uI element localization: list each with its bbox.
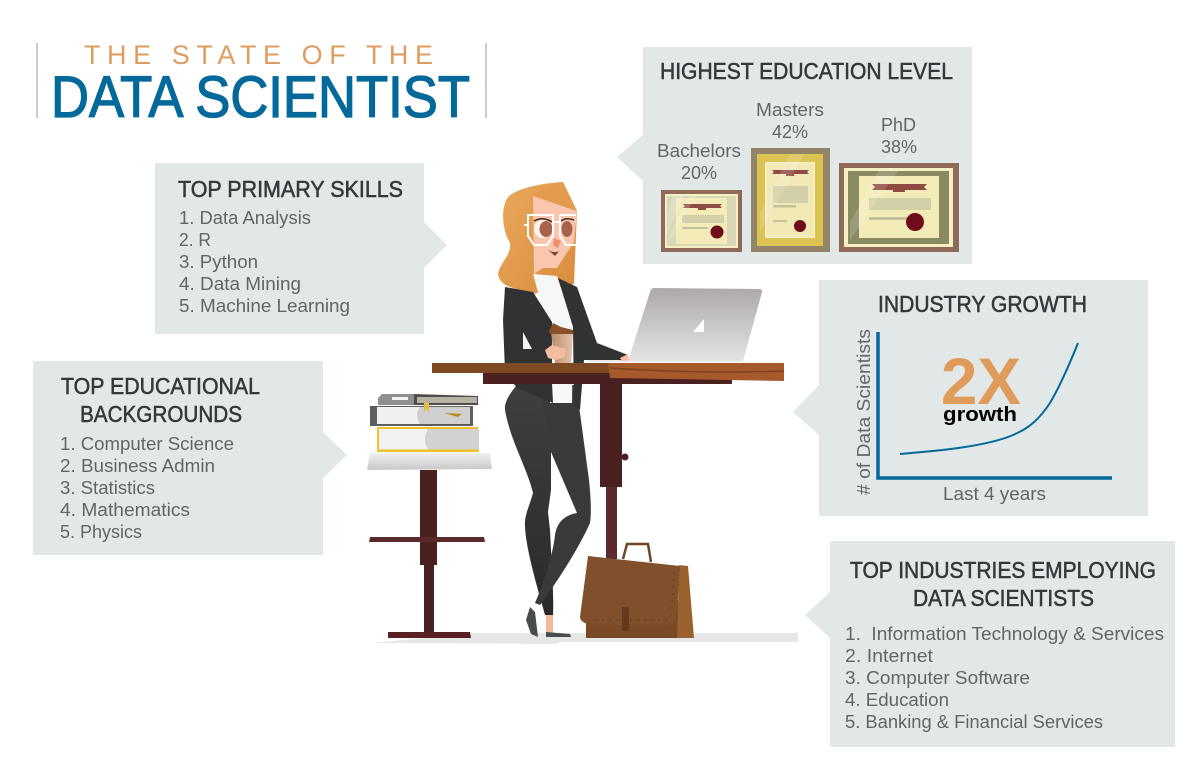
list: backgrounds: 2. Business Admin — [60, 455, 215, 476]
ankle — [546, 615, 553, 633]
book: middle — [370, 406, 473, 426]
glasses — [524, 215, 576, 245]
shirt — [533, 274, 573, 403]
nose — [553, 238, 561, 248]
heading: backgrounds: BACKGROUNDS — [80, 401, 242, 427]
mouth — [547, 249, 559, 256]
laptop — [588, 288, 762, 362]
briefcase side — [677, 565, 694, 638]
briefcase clasp — [622, 607, 629, 631]
title line 2: DATA SCIENTIST — [51, 65, 470, 130]
heading: backgrounds — [61, 373, 260, 427]
label: phd: PhD — [881, 114, 916, 135]
list: industries — [845, 623, 1164, 732]
list: skills: 3. Python — [179, 251, 258, 272]
title — [36, 40, 487, 130]
label: masters: Masters — [756, 99, 824, 120]
briefcase — [580, 544, 694, 638]
shoe: back — [526, 607, 538, 637]
list: backgrounds: 1. Computer Science — [60, 433, 234, 454]
eyes — [534, 219, 574, 238]
heading: industries — [850, 557, 1156, 611]
heading: growth: INDUSTRY GROWTH — [878, 291, 1087, 317]
list: industries: 5. Banking & Financial Services — [845, 711, 1103, 732]
side table with books — [367, 394, 492, 638]
list: backgrounds: 5. Physics — [60, 521, 142, 542]
hand on keyboard — [620, 354, 629, 361]
label: bachelors: Bachelors — [657, 140, 741, 161]
jacket gap — [523, 332, 532, 349]
list: skills — [179, 207, 350, 316]
title line 1: THE STATE OF THE — [84, 40, 433, 70]
callout: 2X: 2X — [941, 344, 1021, 418]
axis label: y: # of Data Scientists — [853, 329, 874, 495]
briefcase stitching — [590, 572, 674, 620]
panel: top primary skills — [155, 163, 447, 334]
desk leg — [600, 382, 628, 559]
book: bottom — [377, 427, 479, 452]
desk top — [432, 363, 784, 384]
list: industries: 4. Education — [845, 689, 949, 710]
list: industries: 1. Information Technology & Services — [845, 623, 1164, 644]
panel: top educational backgrounds — [33, 361, 347, 555]
panel: industry growth — [793, 280, 1148, 516]
panel: top industries — [805, 541, 1175, 747]
face — [533, 196, 577, 274]
chart: growth curve — [878, 332, 1112, 478]
table top — [367, 453, 492, 470]
list: skills: 4. Data Mining — [179, 273, 301, 294]
value: masters: 42% — [772, 121, 808, 142]
book: top — [378, 394, 478, 412]
table upper leg — [420, 470, 437, 565]
value: bachelors: 20% — [681, 162, 717, 183]
table foot — [388, 632, 471, 638]
table shelf bar — [369, 537, 485, 542]
briefcase flap — [580, 556, 680, 625]
panel: highest education level — [617, 47, 972, 264]
icon: phd diploma — [839, 163, 959, 252]
icon: masters diploma — [751, 148, 830, 252]
laptop base — [588, 360, 743, 362]
callout: growth: growth — [943, 404, 1017, 426]
list: skills: 5. Machine Learning — [179, 295, 350, 316]
heading: industries: DATA SCIENTISTS — [913, 585, 1094, 611]
list: industries: 3. Computer Software — [845, 667, 1030, 688]
table lower leg — [424, 565, 434, 633]
fringe — [533, 182, 577, 211]
heading: skills: TOP PRIMARY SKILLS — [178, 176, 403, 202]
list: industries: 2. Internet — [845, 645, 933, 666]
legs — [505, 385, 591, 615]
hair — [498, 182, 577, 294]
laptop logo — [693, 319, 704, 332]
ground shadow — [372, 633, 798, 644]
jacket — [503, 278, 628, 410]
hand — [545, 345, 566, 360]
list: backgrounds: 3. Statistics — [60, 477, 155, 498]
icon: bachelors diploma — [661, 190, 742, 252]
axis label: x: Last 4 years — [943, 483, 1046, 504]
value: phd: 38% — [881, 136, 917, 157]
list: backgrounds: 4. Mathematics — [60, 499, 190, 520]
briefcase handle — [623, 544, 651, 562]
coffee cup — [549, 323, 573, 363]
list: backgrounds — [60, 433, 234, 542]
character: data scientist — [498, 182, 628, 637]
heading: industries: TOP INDUSTRIES EMPLOYING — [850, 557, 1156, 583]
shoe: front — [546, 632, 571, 637]
heading: backgrounds: TOP EDUCATIONAL — [61, 373, 260, 399]
list: skills: 1. Data Analysis — [179, 207, 311, 228]
heading: education: HIGHEST EDUCATION LEVEL — [660, 58, 953, 84]
briefcase lower body — [586, 600, 678, 638]
list: skills: 2. R — [179, 229, 211, 250]
